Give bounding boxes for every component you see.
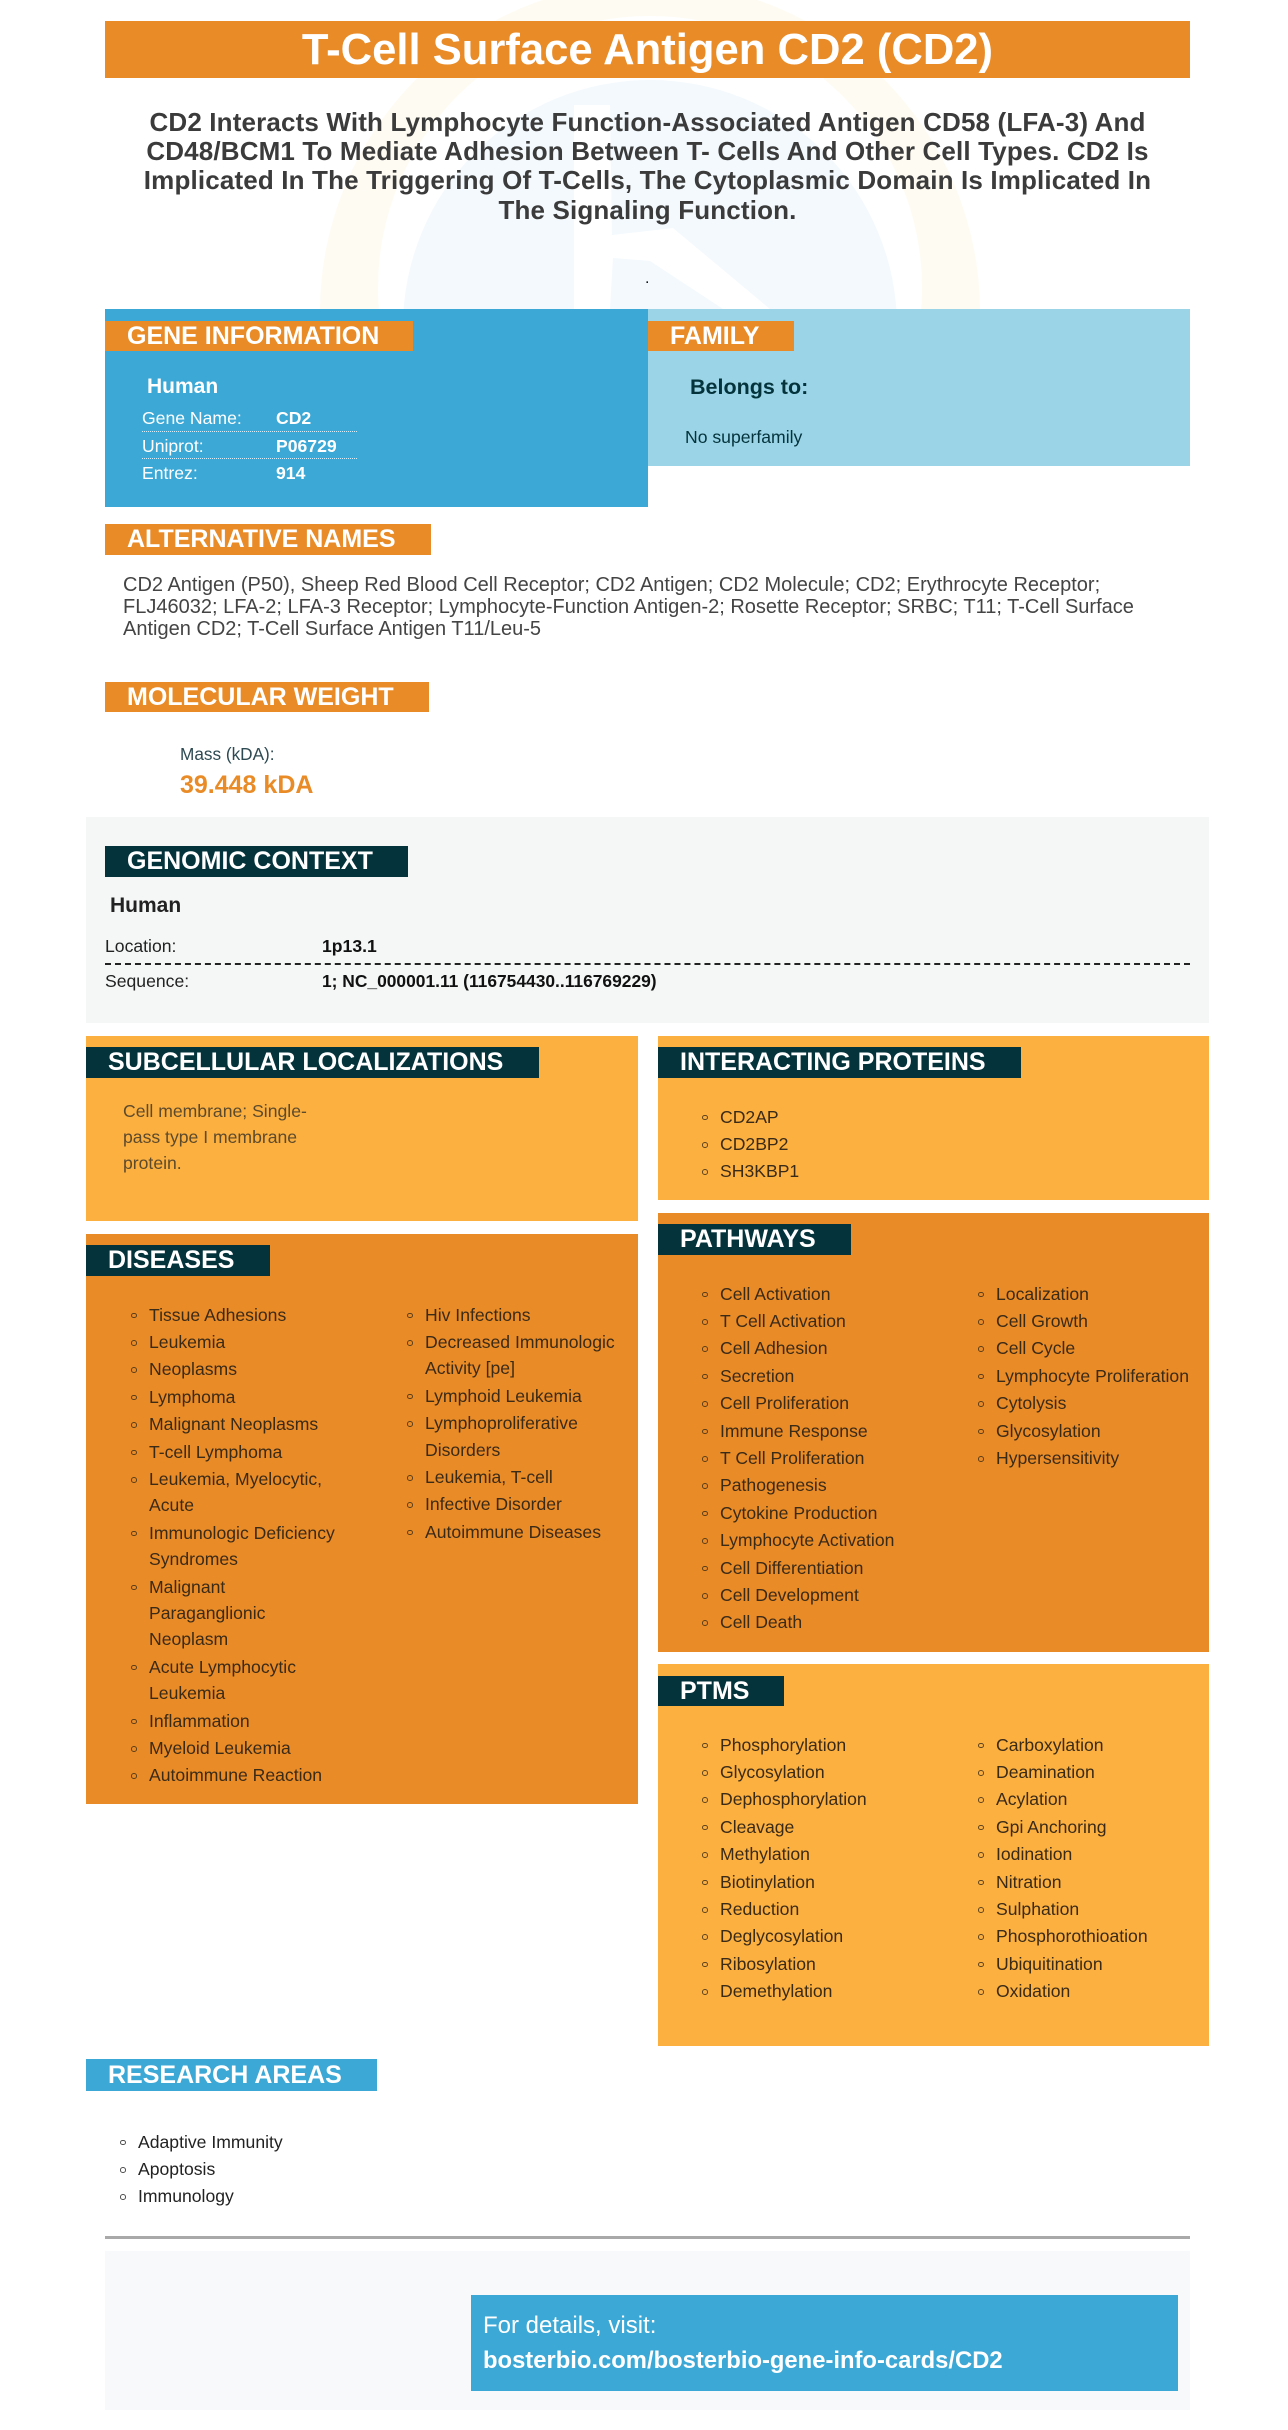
ptm list column 2: Sulphation xyxy=(996,1899,1079,1919)
panel: pathways xyxy=(658,1213,1209,1652)
disease list column 1: Tissue Adhesions xyxy=(149,1304,286,1324)
pathway list column 2: Glycosylation xyxy=(996,1421,1101,1441)
species label: Human xyxy=(147,375,218,398)
alternative names text: CD2 Antigen (P50), Sheep Red Blood Cell Receptor; CD2 Antigen; CD2 Molecule; CD2; Erythrocyte Receptor; xyxy=(123,574,1100,596)
species label: Human xyxy=(110,894,181,917)
alternative names text: FLJ46032; LFA-2; LFA-3 Receptor; Lymphocyte-Function Antigen-2; Rosette Receptor; SRBC; T11; T-Cell Surface xyxy=(123,596,1134,618)
disease list column 2: Lymphoid Leukemia xyxy=(425,1386,582,1406)
heading: diseases: DISEASES xyxy=(108,1246,234,1274)
location label: Location: xyxy=(105,936,176,956)
pathway list column 2: Cytolysis xyxy=(996,1393,1066,1413)
entrez value: 914 xyxy=(276,463,305,483)
heading: ptms xyxy=(658,1676,784,1706)
disease list column 2 xyxy=(407,1304,615,1542)
pathway list column 1: Cytokine Production xyxy=(720,1503,877,1523)
research areas list: Immunology xyxy=(138,2186,234,2206)
ptm list column 2 xyxy=(978,1734,1148,2001)
pathway list column 2: Lymphocyte Proliferation xyxy=(996,1366,1189,1386)
panel: subcellular localizations xyxy=(86,1036,638,1221)
disease list column 1: Autoimmune Reaction xyxy=(149,1765,322,1785)
disease list column 1: Acute Lymphocytic xyxy=(149,1657,296,1677)
disease list column 1: Malignant xyxy=(149,1577,225,1597)
pathway list column 1: Cell Activation xyxy=(720,1284,831,1304)
heading: interacting proteins: INTERACTING PROTEINS xyxy=(680,1048,986,1076)
localization text xyxy=(123,1101,307,1173)
pathway list column 1: Secretion xyxy=(720,1366,794,1386)
pathway list column 1: Cell Adhesion xyxy=(720,1338,828,1358)
disease list column 2: Leukemia, T-cell xyxy=(425,1467,553,1487)
alternative names text: Antigen CD2; T-Cell Surface Antigen T11/Leu-5 xyxy=(123,618,541,640)
disease list column 2: Decreased Immunologic xyxy=(425,1332,615,1352)
protein list xyxy=(702,1106,799,1181)
ptm list column 2: Phosphorothioation xyxy=(996,1926,1148,1946)
callout url: bosterbio.com/bosterbio-gene-info-cards/CD2 xyxy=(483,2347,1003,2374)
family value: No superfamily xyxy=(685,427,802,447)
panel: family xyxy=(648,309,1190,466)
mass value: 39.448 kDA xyxy=(180,771,313,799)
ptm list column 1: Methylation xyxy=(720,1844,810,1864)
ptm list column 1: Glycosylation xyxy=(720,1762,825,1782)
pathway list column 1: Cell Development xyxy=(720,1585,859,1605)
ptm list column 2: Gpi Anchoring xyxy=(996,1817,1107,1837)
pathway list column 2: Hypersensitivity xyxy=(996,1448,1119,1468)
heading: pathways xyxy=(658,1224,851,1255)
pathway list column 2 xyxy=(978,1284,1189,1468)
sequence label: Sequence: xyxy=(105,971,189,991)
panel: diseases xyxy=(86,1234,638,1804)
heading: family: FAMILY xyxy=(670,322,759,350)
ptm list column 2: Acylation xyxy=(996,1789,1067,1809)
disease list column 1: Immunologic Deficiency xyxy=(149,1523,335,1543)
research areas list: Apoptosis xyxy=(138,2159,215,2179)
disease list column 1: Paraganglionic xyxy=(149,1603,265,1623)
disease list column 1: Myeloid Leukemia xyxy=(149,1738,291,1758)
ptm list column 2: Oxidation xyxy=(996,1981,1070,2001)
intro description: The Signaling Function. xyxy=(498,195,797,225)
gene name row: Gene Name: xyxy=(142,408,242,428)
disease list column 1: Syndromes xyxy=(149,1549,238,1569)
heading: research areas: RESEARCH AREAS xyxy=(108,2061,342,2089)
pathway list column 1: Cell Proliferation xyxy=(720,1393,849,1413)
panel: genomic context xyxy=(86,817,1209,1023)
disease list column 2: Infective Disorder xyxy=(425,1494,562,1514)
disease list column 1 xyxy=(131,1304,335,1785)
protein list: CD2BP2 xyxy=(720,1134,788,1154)
intro description xyxy=(144,107,1151,225)
sequence value: 1; NC_000001.11 (116754430..116769229) xyxy=(322,971,657,991)
pathway list column 2: Cell Cycle xyxy=(996,1338,1075,1358)
ptm list column 1: Deglycosylation xyxy=(720,1926,843,1946)
background watermark logo xyxy=(320,0,980,309)
ptm list column 1: Reduction xyxy=(720,1899,799,1919)
separator dot: . xyxy=(645,270,649,287)
research areas list xyxy=(120,2132,283,2206)
pathway list column 1: Pathogenesis xyxy=(720,1475,827,1495)
callout label: For details, visit: xyxy=(483,2312,656,2339)
ptm list column 2: Ubiquitination xyxy=(996,1954,1103,1974)
ptm list column 1: Ribosylation xyxy=(720,1954,816,1974)
belongs to label: Belongs to: xyxy=(690,375,808,399)
panel: interacting proteins xyxy=(658,1036,1209,1200)
pathway list column 1: T Cell Proliferation xyxy=(720,1448,864,1468)
protein list: CD2AP xyxy=(720,1106,779,1126)
uniprot value: P06729 xyxy=(276,436,337,456)
intro description: CD48/BCM1 To Mediate Adhesion Between T- Cells And Other Cell Types. CD2 Is xyxy=(146,136,1149,166)
pathway list column 1: Cell Differentiation xyxy=(720,1558,863,1578)
ptm list column 1 xyxy=(702,1734,867,2001)
disease list column 1: Neoplasms xyxy=(149,1359,237,1379)
heading: molecular weight: MOLECULAR WEIGHT xyxy=(127,683,394,711)
alternative names text xyxy=(123,574,1134,640)
disease list column 1: Lymphoma xyxy=(149,1387,235,1407)
pathway list column 2: Localization xyxy=(996,1284,1089,1304)
heading: genomic context: GENOMIC CONTEXT xyxy=(127,847,373,875)
ptm list column 2: Nitration xyxy=(996,1872,1062,1892)
heading: gene information: GENE INFORMATION xyxy=(127,322,379,350)
panel: ptms xyxy=(658,1664,1209,2046)
pathway list column 2: Cell Growth xyxy=(996,1311,1088,1331)
disease list column 1: Neoplasm xyxy=(149,1629,228,1649)
ptm list column 1: Biotinylation xyxy=(720,1872,815,1892)
disease list column 1: Malignant Neoplasms xyxy=(149,1414,318,1434)
heading: pathways: PATHWAYS xyxy=(680,1225,816,1253)
disease list column 2: Hiv Infections xyxy=(425,1304,531,1324)
disease list column 2: Disorders xyxy=(425,1440,500,1460)
pathway list column 1: T Cell Activation xyxy=(720,1311,846,1331)
uniprot row: Uniprot: xyxy=(142,436,204,456)
disease list column 1: Acute xyxy=(149,1495,194,1515)
panel: footer xyxy=(105,2251,1190,2410)
heading: subcellular localizations: SUBCELLULAR LOCALIZATIONS xyxy=(108,1048,503,1076)
heading: family xyxy=(648,321,794,351)
heading: diseases xyxy=(86,1245,270,1276)
heading: alternative names: ALTERNATIVE NAMES xyxy=(127,525,396,553)
ptm list column 1: Demethylation xyxy=(720,1981,832,2001)
disease list column 1: Inflammation xyxy=(149,1711,250,1731)
pathway list column 1: Immune Response xyxy=(720,1421,868,1441)
intro description: Implicated In The Triggering Of T-Cells, The Cytoplasmic Domain Is Implicated In xyxy=(144,165,1151,195)
disease list column 1: T-cell Lymphoma xyxy=(149,1442,282,1462)
disease list column 1: Leukemia xyxy=(149,1332,225,1352)
research areas list: Adaptive Immunity xyxy=(138,2132,283,2152)
intro description: CD2 Interacts With Lymphocyte Function-Associated Antigen CD58 (LFA-3) And xyxy=(149,107,1146,137)
disease list column 2: Lymphoproliferative xyxy=(425,1413,578,1433)
title: T-Cell Surface Antigen CD2 (CD2) xyxy=(302,26,993,74)
pathway list column 1: Lymphocyte Activation xyxy=(720,1530,894,1550)
title xyxy=(105,21,1190,78)
disease list column 1: Leukemia xyxy=(149,1683,225,1703)
disease list column 1: Leukemia, Myelocytic, xyxy=(149,1469,322,1489)
ptm list column 1: Dephosphorylation xyxy=(720,1789,867,1809)
heading: ptms: PTMS xyxy=(680,1677,749,1705)
ptm list column 1: Phosphorylation xyxy=(720,1734,846,1754)
mass label: Mass (kDA): xyxy=(180,744,275,764)
localization text: protein. xyxy=(123,1153,182,1173)
gene name value: CD2 xyxy=(276,408,311,428)
ptm list column 2: Carboxylation xyxy=(996,1734,1104,1754)
entrez row: Entrez: xyxy=(142,463,198,483)
ptm list column 1: Cleavage xyxy=(720,1817,794,1837)
ptm list column 2: Iodination xyxy=(996,1844,1072,1864)
localization text: Cell membrane; Single- xyxy=(123,1101,307,1121)
pathway list column 1: Cell Death xyxy=(720,1612,802,1632)
disease list column 2: Autoimmune Diseases xyxy=(425,1522,601,1542)
gene table xyxy=(142,408,357,483)
callout: details link xyxy=(471,2295,1178,2391)
localization text: pass type I membrane xyxy=(123,1127,297,1147)
location value: 1p13.1 xyxy=(322,936,377,956)
disease list column 2: Activity [pe] xyxy=(425,1358,515,1378)
panel: gene information xyxy=(105,309,648,507)
pathway list column 1 xyxy=(702,1284,894,1632)
ptm list column 2: Deamination xyxy=(996,1762,1095,1782)
protein list: SH3KBP1 xyxy=(720,1161,799,1181)
